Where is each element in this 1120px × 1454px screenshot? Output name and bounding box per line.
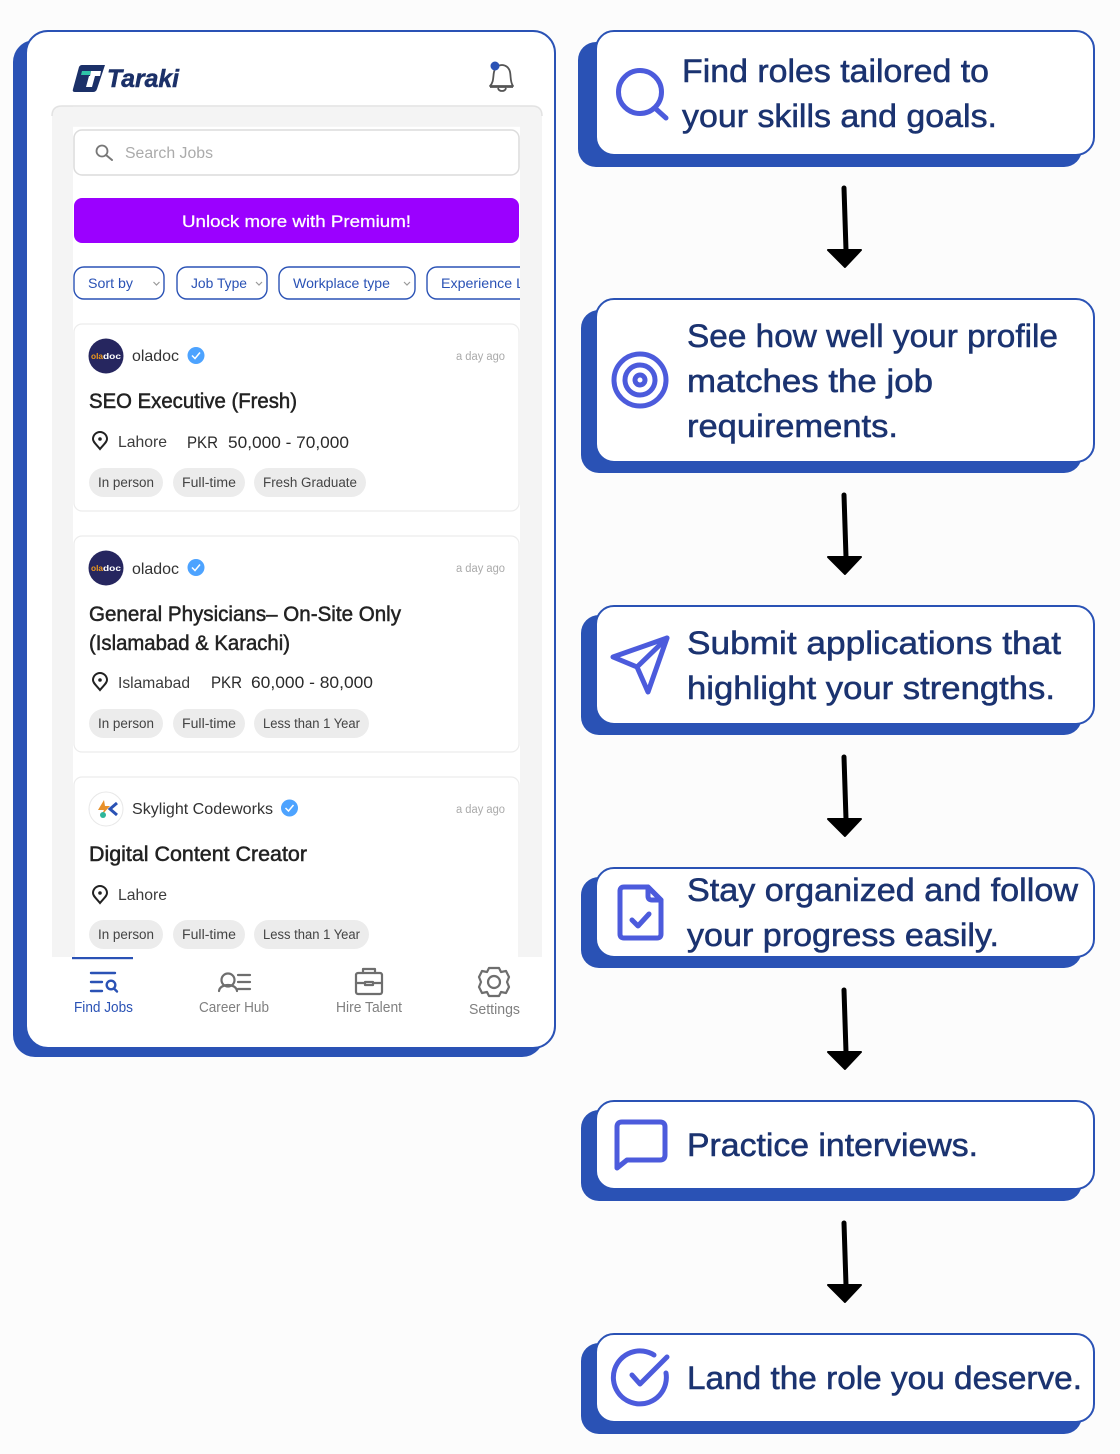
- job card: General Physicians: General Physicians– On-Site Only: [89, 603, 401, 626]
- nav item: Settings: Settings: [469, 1002, 520, 1018]
- text: profile match: requirements.: [687, 408, 898, 444]
- job card: SEO Executive: oladoc: [132, 348, 179, 365]
- job card: General Physicians: (Islamabad & Karachi): [89, 632, 290, 655]
- text: land the role: Land the role you deserve.: [687, 1360, 1082, 1396]
- nav item: Find Jobs: [74, 973, 133, 1016]
- text: submit applications: [687, 625, 1061, 706]
- job card: Digital Content Creator: Full-time: [182, 927, 236, 942]
- text: stay organized: your progress easily.: [687, 917, 999, 953]
- bottom navigation: [72, 957, 520, 1018]
- job card: SEO Executive: a day ago: [456, 351, 505, 363]
- icon: magnifier: [618, 70, 666, 118]
- nav item: Hire Talent: Hire Talent: [336, 1000, 402, 1016]
- text: practice interviews: Practice interviews.: [687, 1127, 978, 1163]
- text: find roles: your skills and goals.: [682, 98, 997, 134]
- job card: General Physicians: ola: [91, 563, 103, 573]
- logo: Taraki: [73, 65, 180, 93]
- job card: Digital Content Creator: Skylight Codeworks: [132, 801, 273, 818]
- filter chips: Sort by: [88, 275, 133, 291]
- step card: submit applications: [581, 606, 1094, 735]
- job card: SEO Executive: Full-time: [182, 475, 236, 490]
- job card: SEO Executive: ola: [91, 351, 103, 361]
- arrow 5: [828, 1223, 861, 1302]
- arrow 3: [828, 757, 861, 836]
- job card: SEO Executive: [74, 324, 519, 511]
- job card: General Physicians: In person: [98, 716, 154, 731]
- text: stay organized: [687, 872, 1079, 953]
- icon: paper plane: [613, 638, 667, 692]
- icon: notification bell: [490, 62, 513, 91]
- job card: General Physicians: a day ago: [456, 563, 505, 575]
- search box: [74, 130, 519, 175]
- step card: profile match: [581, 299, 1094, 473]
- logo: Taraki: Taraki: [107, 65, 180, 93]
- panel: job list area: [52, 106, 557, 997]
- step card: stay organized: [581, 868, 1094, 968]
- job card: Digital Content Creator: Digital Content Creator: [89, 843, 307, 866]
- nav item: Settings: [469, 968, 520, 1018]
- filter chips: Experience L: [441, 275, 524, 291]
- icon: target: [614, 354, 666, 406]
- job card: General Physicians: Full-time: [182, 716, 236, 731]
- panel: phone app mockup: [13, 31, 557, 1057]
- job card: General Physicians: Less than 1 Year: [263, 716, 360, 731]
- text: submit applications: highlight your strengths.: [687, 670, 1055, 706]
- job card: SEO Executive: In person: [98, 475, 154, 490]
- text: find roles: [682, 53, 997, 134]
- search box: Search Jobs: [125, 145, 213, 162]
- job card: General Physicians: [74, 536, 519, 752]
- job card: Digital Content Creator: Lahore: [118, 887, 167, 904]
- step card: land the role: [581, 1334, 1094, 1434]
- text: profile match: See how well your profile: [687, 318, 1058, 354]
- step card: find roles: [578, 31, 1094, 167]
- text: submit applications: Submit applications that: [687, 625, 1061, 661]
- text: profile match: matches the job: [687, 363, 933, 399]
- job card: SEO Executive: PKR: [187, 433, 218, 452]
- filter chips: [74, 267, 557, 299]
- step card: practice interviews: [581, 1101, 1094, 1201]
- icon: check circle: [613, 1351, 667, 1404]
- text: profile match: [687, 318, 1058, 444]
- job card: Digital Content Creator: [74, 776, 520, 957]
- job card: General Physicians: PKR: [211, 673, 242, 692]
- arrow 1: [828, 188, 861, 267]
- job card: SEO Executive: 50,000 - 70,000: [228, 433, 349, 452]
- job card: Digital Content Creator: Less than 1 Year: [263, 927, 360, 942]
- filter chips: Job Type: [191, 275, 247, 291]
- job card: SEO Executive: Fresh Graduate: [263, 475, 357, 490]
- nav item: Find Jobs: Find Jobs: [74, 1000, 133, 1016]
- arrow 4: [828, 990, 861, 1069]
- job card: SEO Executive: Lahore: [118, 434, 167, 451]
- nav item: Career Hub: [199, 974, 269, 1016]
- nav item: Career Hub: Career Hub: [199, 1000, 269, 1016]
- job card: SEO Executive: SEO Executive (Fresh): [89, 390, 297, 413]
- nav item: Hire Talent: [336, 969, 402, 1016]
- job card: General Physicians: 60,000 - 80,000: [251, 673, 373, 692]
- job card: Digital Content Creator: In person: [98, 927, 154, 942]
- arrow 2: [828, 495, 861, 574]
- job card: General Physicians: oladoc: [132, 561, 179, 578]
- icon: chat bubble: [617, 1122, 665, 1168]
- premium button: Unlock more with Premium!: [182, 212, 411, 231]
- job card: SEO Executive: doc: [103, 351, 121, 361]
- premium button: [74, 198, 519, 243]
- text: find roles: Find roles tailored to: [682, 53, 989, 89]
- text: stay organized: Stay organized and follow: [687, 872, 1079, 908]
- filter chips: Workplace type: [293, 275, 390, 291]
- job card: General Physicians: doc: [103, 563, 121, 573]
- job card: General Physicians: Islamabad: [118, 675, 190, 692]
- icon: document with check: [620, 887, 661, 938]
- job card: Digital Content Creator: a day ago: [456, 804, 505, 816]
